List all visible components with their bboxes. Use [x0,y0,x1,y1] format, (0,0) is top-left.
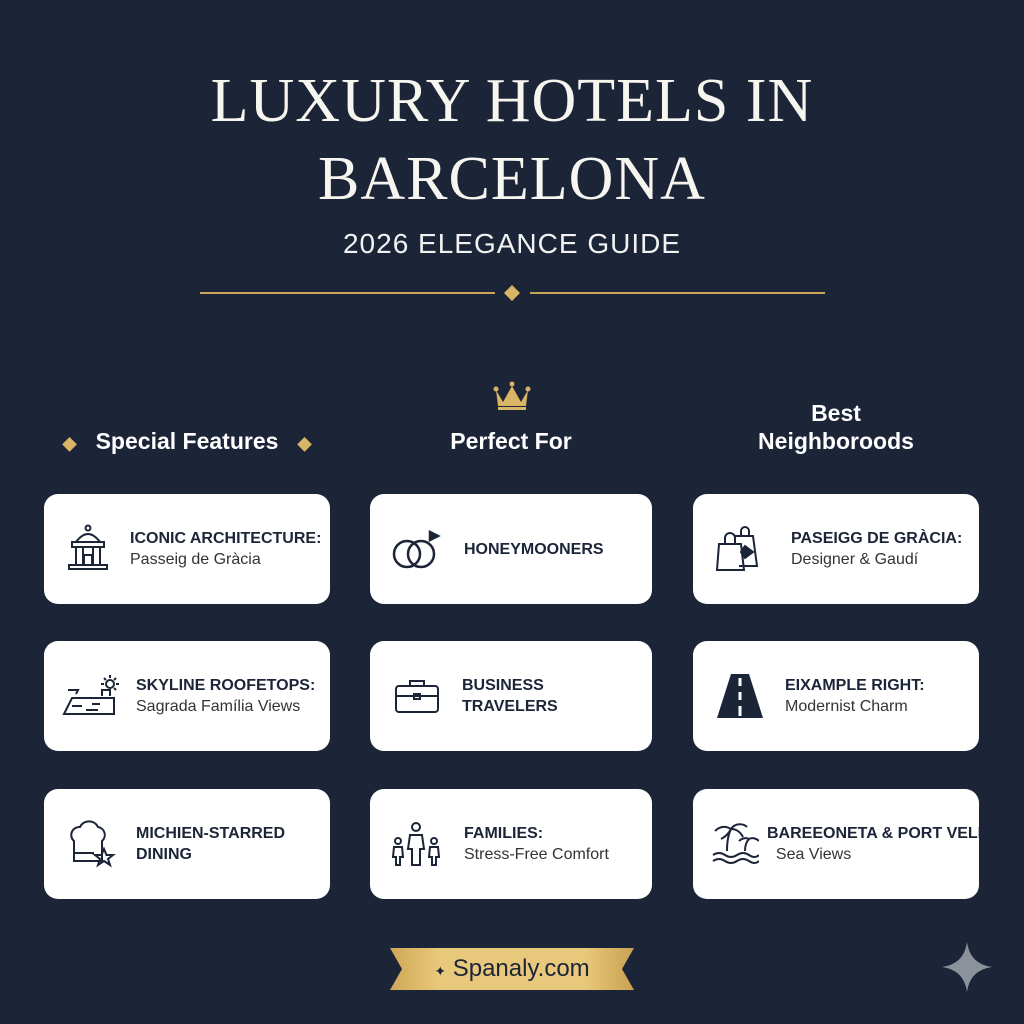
card: iconic architecture: Passeig de Gràcia [130,551,261,568]
card: business travelers: TRAVELERS [462,698,558,715]
icon: sparkle [942,942,992,992]
card: michelin dining: MICHIEN-STARRED [136,825,285,842]
card: families: FAMILIES: [464,825,543,842]
card: business travelers: BUSINESS [462,677,544,694]
card: skyline rooftops: Sagrada Família Views [136,698,300,715]
title [211,67,813,213]
gold divider [200,285,825,301]
heading: best neighborhoods [758,400,914,454]
card: passeig de gracia: Designer & Gaudí [791,551,918,568]
card: passeig de gracia: PASEIGG DE GRÀCIA: [791,530,962,547]
card: iconic architecture: ICONIC ARCHITECTURE: [130,530,321,547]
card: barceloneta [693,789,979,899]
card: eixample: Modernist Charm [785,698,908,715]
title: LUXURY HOTELS IN [211,67,813,135]
card: families [370,789,652,899]
heading: special features: ◆ Special Features ◆ [63,428,311,454]
title: BARCELONA [318,145,706,213]
card: barceloneta: Sea Views [776,846,851,863]
card: business travelers [370,641,652,751]
card: families: Stress-Free Comfort [464,846,609,863]
card: honeymooners [370,494,652,604]
ribbon: website: ✦ Spanaly.com [434,955,590,982]
heading: best neighborhoods: Neighboroods [758,428,914,454]
heading: perfect for: Perfect For [450,428,572,454]
card: skyline rooftops: SKYLINE ROOFETOPS: [136,677,315,694]
card: honeymooners: HONEYMOONERS [464,540,604,558]
heading: best neighborhoods: Best [811,400,861,426]
card: skyline rooftops [44,641,330,751]
card: iconic architecture [44,494,330,604]
card: eixample [693,641,979,751]
icon: crown [494,382,530,410]
card: michelin dining: DINING [136,846,192,863]
card: passeig de gracia [693,494,979,604]
ribbon: website [390,948,634,990]
subtitle: 2026 ELEGANCE GUIDE [343,228,681,259]
card: michelin dining [44,789,330,899]
card: eixample: EIXAMPLE RIGHT: [785,677,925,694]
